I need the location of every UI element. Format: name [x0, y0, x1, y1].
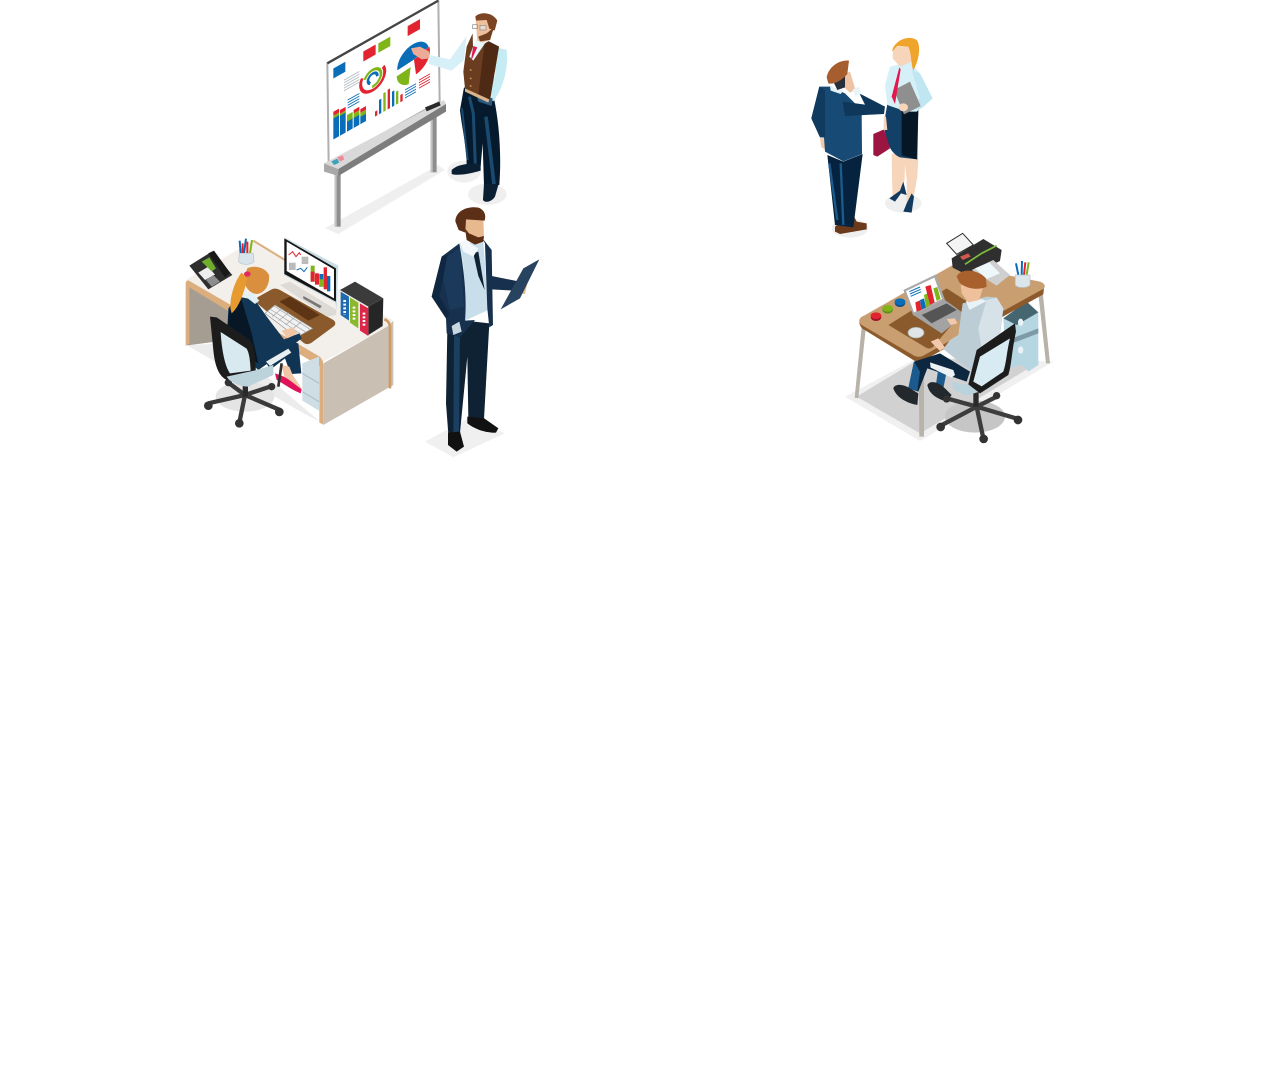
- jacket left: [432, 243, 475, 337]
- presenter foot shadows: [447, 161, 507, 205]
- man face and neck: [843, 72, 855, 93]
- man shoes: [835, 215, 867, 234]
- mouse: [908, 327, 924, 338]
- hair: [455, 207, 485, 233]
- desk left panel: [187, 283, 228, 345]
- pocket hand: [477, 95, 493, 106]
- desk edge trim: [186, 280, 323, 425]
- seated man collar: [966, 299, 987, 310]
- seated man hair: [957, 271, 987, 289]
- presenter vest: [463, 33, 499, 100]
- woman: [873, 38, 933, 213]
- pencil cup: [1015, 261, 1030, 287]
- presenter back sleeve: [485, 46, 507, 101]
- man back hand: [820, 137, 826, 149]
- seated man head: [961, 285, 983, 302]
- pencil cup: [239, 239, 254, 264]
- jacket highlight: [443, 248, 464, 310]
- vest buttons: [470, 69, 472, 87]
- woman legs: [263, 340, 302, 393]
- presenter: [411, 13, 507, 202]
- trouser belt: [465, 88, 489, 103]
- whiteboard charts: [333, 14, 430, 140]
- presenter trousers: [460, 87, 500, 185]
- man raised arm: [843, 93, 885, 116]
- keyboard: [265, 305, 313, 337]
- whiteboard floor shadow: [325, 165, 445, 234]
- monitor: [280, 238, 338, 317]
- whiteboard stand legs: [335, 115, 437, 227]
- woman skirt: [884, 104, 918, 159]
- scene: two colleagues talking: [811, 38, 933, 238]
- binders: [340, 282, 383, 336]
- woman collar: [243, 293, 259, 304]
- trouser stripes: [462, 97, 494, 184]
- desk phone: [189, 251, 232, 289]
- beard: [465, 228, 484, 245]
- woman hand: [282, 327, 297, 338]
- jacket shading: [811, 87, 825, 137]
- presenter tie: [471, 46, 477, 62]
- woman shirt: [885, 62, 933, 112]
- tablet: [894, 82, 921, 114]
- man trousers: [827, 154, 863, 227]
- office chair: [210, 317, 291, 387]
- seated man jacket: [943, 297, 1003, 373]
- printer: [947, 233, 1010, 286]
- seated man hands: [931, 318, 957, 351]
- desk mat: [888, 288, 970, 349]
- man nape hair: [833, 75, 845, 90]
- mat inset: [279, 297, 320, 321]
- folder: [501, 259, 539, 309]
- woman face: [893, 47, 912, 67]
- trouser stripe: [453, 332, 460, 433]
- man shirt cuff: [853, 87, 861, 96]
- man: [811, 61, 885, 234]
- seated man legs: [893, 353, 970, 405]
- whiteboard: [327, 1, 440, 164]
- foot shadow: [425, 418, 505, 457]
- man jacket: [811, 87, 862, 161]
- woman head and hair: [230, 267, 269, 313]
- desk top: [187, 241, 393, 362]
- presenter glasses: [473, 25, 486, 30]
- floor shadow inner: [857, 358, 1040, 433]
- jacket shading: [978, 298, 1003, 358]
- desk legs: [855, 292, 1050, 437]
- woman hair: [892, 38, 919, 71]
- floor shadow: [845, 357, 1053, 441]
- drawer unit: [302, 357, 319, 411]
- desk top: [859, 265, 1045, 357]
- whiteboard tray with markers: [324, 100, 446, 176]
- desk mat: [257, 289, 335, 344]
- skirt dark panel: [902, 110, 918, 159]
- jacket shadow: [432, 255, 449, 318]
- scene: presenter at whiteboard: [324, 1, 507, 234]
- man collar: [830, 87, 843, 94]
- face: [465, 219, 484, 244]
- woman heels: [889, 182, 914, 213]
- desk buttons: [871, 298, 905, 321]
- hand on folder: [518, 283, 527, 294]
- desk edge: [859, 288, 1044, 362]
- trousers: [446, 320, 489, 434]
- shoes: [448, 417, 498, 452]
- scene: woman at white desk: [186, 238, 393, 428]
- red tie: [892, 67, 901, 104]
- man hair: [827, 61, 849, 84]
- woman hand: [899, 103, 908, 111]
- woman back hand: [883, 117, 887, 130]
- folder arm: [492, 276, 517, 291]
- laptop: [903, 274, 965, 333]
- presenter face: [476, 19, 492, 43]
- woman arm: [906, 70, 933, 112]
- trouser stripes: [829, 163, 843, 225]
- foot shadows: [832, 194, 922, 238]
- chair base: [204, 377, 284, 428]
- presenter hair: [475, 13, 497, 31]
- handbag: [873, 129, 890, 157]
- presenter shoes: [452, 163, 499, 202]
- collar: [460, 241, 478, 257]
- woman jacket: [227, 297, 302, 370]
- desk back trim: [253, 241, 285, 260]
- woman jacket shadow: [227, 300, 258, 363]
- vest shading: [478, 39, 499, 100]
- tie: [473, 252, 485, 290]
- office chair: [930, 323, 1022, 443]
- scene: bearded man with folder: [425, 207, 539, 457]
- desk front panel: [323, 321, 393, 425]
- jacket right: [483, 239, 493, 327]
- presenter hand: [411, 47, 429, 59]
- presenter beard: [478, 27, 494, 41]
- shirt: [460, 242, 488, 321]
- desk floor shadow: [187, 343, 320, 422]
- scene: man at wooden desk: [845, 233, 1053, 443]
- woman legs: [892, 153, 918, 208]
- presenter pointing arm: [429, 36, 467, 71]
- desk side trim: [384, 319, 390, 388]
- drawer unit: [1003, 302, 1038, 372]
- presenter shirt front: [469, 37, 492, 61]
- hand in pocket: [452, 322, 462, 335]
